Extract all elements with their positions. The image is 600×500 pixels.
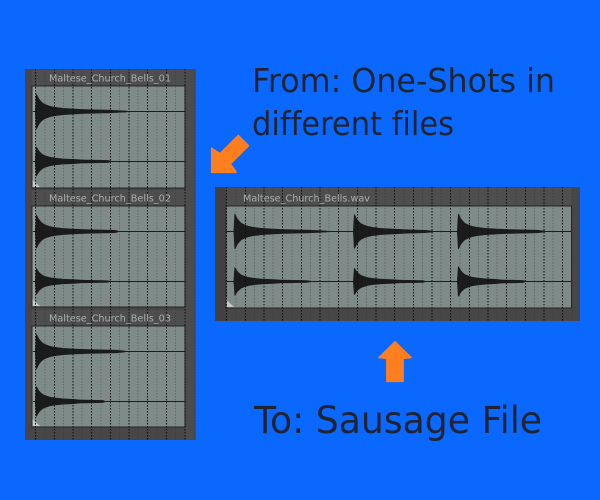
waveform bottom 03 — [35, 386, 105, 417]
waveform top hit 3 — [457, 214, 545, 250]
waveform plot 03 — [32, 326, 185, 427]
waveform plot 02 — [32, 206, 185, 307]
waveform bottom hit 2 — [353, 268, 425, 295]
waveform bottom 02 — [35, 268, 110, 295]
arrow: up to the sausage file — [379, 342, 411, 382]
waveform top 03 — [35, 334, 125, 370]
waveform plot sausage — [226, 206, 572, 308]
panel: Maltese_Church_Bells_01 — [32, 70, 185, 188]
file title sausage: Maltese_Church_Bells.wav — [243, 194, 370, 204]
waveform bottom hit 3 — [457, 266, 525, 297]
waveform top hit 2 — [353, 214, 433, 249]
heading: to: To: Sausage File — [253, 399, 542, 442]
waveform top 01 — [35, 94, 127, 130]
grid lines — [45, 69, 194, 440]
panel: Maltese_Church_Bells_03 — [32, 310, 185, 427]
grid lines — [236, 187, 572, 321]
waveform bottom 01 — [35, 147, 111, 176]
waveform top hit 1 — [234, 214, 328, 250]
heading: from: different files — [252, 104, 454, 143]
file title 01: Maltese_Church_Bells_01 — [49, 74, 171, 84]
file title 03: Maltese_Church_Bells_03 — [49, 314, 171, 324]
arrow: diagonal to the stack — [212, 135, 249, 172]
waveform top 02 — [35, 214, 118, 249]
panel: one-shot files stack — [25, 69, 196, 440]
waveform plot 01 — [32, 86, 185, 188]
heading: from — [252, 61, 555, 143]
panel: sausage file — [215, 187, 580, 321]
file title 02: Maltese_Church_Bells_02 — [49, 194, 171, 204]
panel: Maltese_Church_Bells_02 — [32, 190, 185, 307]
heading: from: From: One-Shots in — [252, 61, 555, 100]
waveform bottom hit 1 — [234, 267, 310, 296]
